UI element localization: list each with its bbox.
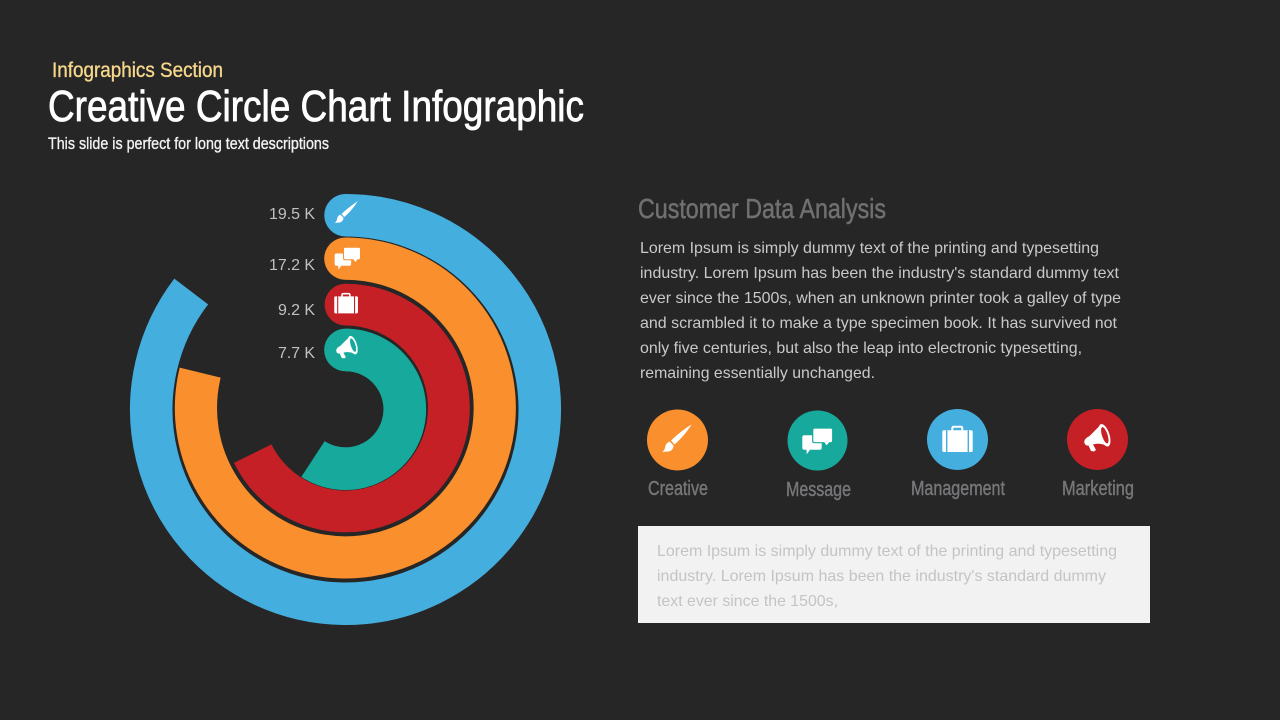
title: Creative Circle Chart Infographic	[48, 82, 584, 131]
body paragraph: remaining essentially unchanged.	[640, 365, 875, 382]
value label: 7.7 K: 7.7 K	[278, 345, 315, 362]
radial bar chart	[151, 194, 540, 604]
label: Management	[911, 478, 1005, 500]
body paragraph: Lorem Ipsum is simply dummy text of the printing and typesetting	[640, 240, 1099, 257]
icon: briefcase	[942, 427, 973, 452]
icon: chat bubbles	[802, 428, 833, 454]
value label: 19.5 K: 19.5 K	[269, 206, 315, 223]
callout text: text ever since the 1500s,	[657, 593, 838, 610]
icon: brush on blue ring	[335, 201, 358, 223]
body paragraph: ever since the 1500s, when an unknown printer took a galley of type	[640, 290, 1121, 307]
category: Marketing	[1062, 409, 1134, 500]
ring: orange 17.2 K	[196, 238, 495, 557]
callout text	[657, 543, 1117, 610]
ring: teal 7.7 K	[313, 329, 405, 469]
icon: chat bubbles on orange ring	[335, 247, 360, 270]
body paragraph: and scrambled it to make a type specimen book. It has survived not	[640, 315, 1118, 332]
value label: 17.2 K: 17.2 K	[269, 257, 315, 274]
panel heading: Customer Data Analysis	[638, 193, 886, 224]
callout box	[638, 526, 1150, 623]
body paragraph	[640, 240, 1121, 382]
ring: blue 19.5 K	[151, 194, 540, 604]
category: Message	[786, 410, 851, 501]
category: Management	[911, 409, 1005, 500]
label: Marketing	[1062, 478, 1134, 500]
icon: brush	[662, 424, 692, 452]
label: Creative	[648, 478, 708, 500]
category: Creative	[647, 410, 708, 500]
value label: 9.2 K: 9.2 K	[278, 302, 315, 319]
section label: Infographics Section	[52, 59, 223, 82]
callout text: industry. Lorem Ipsum has been the industry's standard dummy	[657, 568, 1106, 585]
ring: red 9.2 K	[253, 284, 449, 511]
label: Message	[786, 479, 851, 501]
body paragraph: industry. Lorem Ipsum has been the industry's standard dummy text	[640, 265, 1120, 282]
subtitle: This slide is perfect for long text descriptions	[48, 134, 329, 153]
icon: briefcase on red ring	[334, 294, 358, 313]
icon: megaphone	[1084, 423, 1113, 452]
callout text: Lorem Ipsum is simply dummy text of the printing and typesetting	[657, 543, 1117, 560]
body paragraph: only five centuries, but also the leap into electronic typesetting,	[640, 340, 1082, 357]
icon: megaphone on teal ring	[336, 335, 360, 358]
